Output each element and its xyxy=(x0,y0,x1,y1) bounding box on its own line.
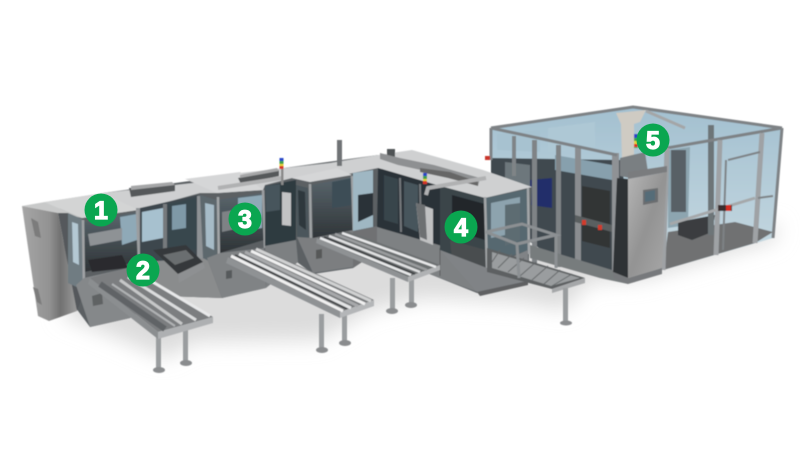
roller frame xyxy=(486,224,556,278)
marker 2: 2 xyxy=(136,257,150,285)
dark tray xyxy=(153,245,203,274)
signal tower xyxy=(280,158,284,169)
cell interior machinery xyxy=(491,122,628,284)
legs xyxy=(156,335,161,368)
right rear machinery xyxy=(668,125,715,240)
middle station base xyxy=(140,258,222,298)
robot cell control cabinet xyxy=(613,166,667,284)
station 3 side glass xyxy=(200,195,217,265)
station 1 base xyxy=(76,268,130,327)
marker 3 xyxy=(228,202,262,236)
conveyor at station 3 xyxy=(226,248,374,353)
marker 3: 3 xyxy=(238,206,252,234)
left electrical cabinet xyxy=(22,202,84,321)
robot cell: safety fence xyxy=(485,107,782,284)
station 4 signal tower xyxy=(423,173,427,184)
marker 5: 5 xyxy=(646,127,660,155)
legs xyxy=(319,314,324,350)
roller leg xyxy=(563,288,568,321)
station 3 window xyxy=(218,193,264,253)
back glass of cell xyxy=(491,107,782,270)
legs xyxy=(390,278,395,311)
station 3 xyxy=(200,190,266,298)
signal arm xyxy=(218,178,282,188)
station 3b xyxy=(296,176,354,273)
HMI screen xyxy=(643,188,658,205)
conveyor at station 2 xyxy=(88,268,213,373)
station 3b back window and indicator xyxy=(218,158,298,288)
red stop on back corner xyxy=(485,156,490,160)
floor shadow xyxy=(60,225,780,358)
machine body backing xyxy=(60,155,532,327)
marker 4 xyxy=(444,210,478,244)
station 1 side glass xyxy=(68,213,83,290)
middle station between 1 and 3 xyxy=(136,195,222,298)
station 4 base xyxy=(440,250,528,292)
HMI panel xyxy=(282,192,291,226)
station 4 xyxy=(416,173,529,296)
marker 5 xyxy=(636,124,670,156)
station 4 HMI panel xyxy=(416,203,433,245)
station 4 signal arm xyxy=(426,178,486,195)
station 4 window xyxy=(485,189,529,264)
station 4 roller conveyor xyxy=(486,224,585,326)
section behind station 4 xyxy=(353,168,486,293)
station 1 window xyxy=(84,212,138,272)
robot arm xyxy=(616,110,685,178)
red door switch xyxy=(718,205,732,211)
marker 1 xyxy=(84,194,118,226)
dark section left of station 4 xyxy=(440,186,485,268)
station 1 xyxy=(68,210,139,327)
top duct boxes xyxy=(129,140,480,197)
station 3 base xyxy=(207,248,266,298)
back body: tops xyxy=(45,150,532,218)
fence rails xyxy=(491,107,782,270)
marker 4: 4 xyxy=(454,214,468,242)
conveyor at station 3b xyxy=(316,231,440,314)
marker 2 xyxy=(126,254,160,286)
marker 1: 1 xyxy=(94,197,108,225)
cell floor xyxy=(663,222,773,270)
